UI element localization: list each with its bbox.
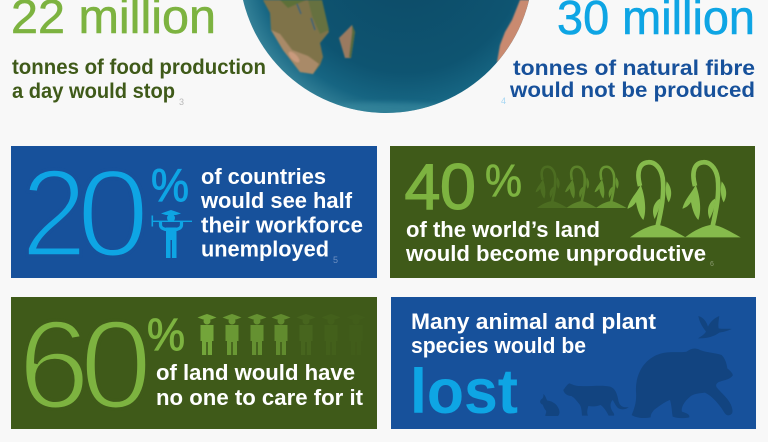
big number 20% xyxy=(21,144,189,283)
panel text: no one to care for it xyxy=(156,385,364,410)
big number 40%: 0 xyxy=(440,150,476,223)
stat: 22 million: tonnes of food production xyxy=(12,56,266,79)
panel: 40% of land: 6 xyxy=(710,261,714,268)
panel text xyxy=(156,360,364,410)
panel text: their workforce xyxy=(201,212,363,238)
big number 60%: % xyxy=(147,309,185,360)
stat: 22 million: a day would stop xyxy=(12,80,175,103)
stat: 30 million: tonnes of natural fibre xyxy=(513,57,755,80)
big number 40%: 4 xyxy=(404,150,441,223)
panel text: would become unproductive xyxy=(405,241,706,266)
stat: 30 million: would not be produced xyxy=(509,79,755,102)
big number 20%: % xyxy=(151,159,189,211)
panel text: of the world’s land xyxy=(406,217,600,242)
panel text: species would be xyxy=(411,333,586,358)
panel: 60% of land xyxy=(11,295,377,436)
stat: 22 million xyxy=(11,0,266,107)
panel: 20% of countries xyxy=(11,144,377,283)
icon: animal silhouettes xyxy=(540,316,733,418)
panel text xyxy=(411,309,657,358)
panel: 40% of land xyxy=(390,146,755,278)
word: lost: lost xyxy=(410,357,518,427)
icon: row of farmers fading out xyxy=(198,314,366,355)
icon: wilting plants xyxy=(536,162,741,237)
big number 60%: 0 xyxy=(80,295,152,436)
big number 60%: 6 xyxy=(18,295,90,436)
panel: species lost xyxy=(391,297,756,429)
panel text xyxy=(200,164,363,262)
icon: farmer with rake xyxy=(152,210,192,258)
big number 40% xyxy=(404,150,522,223)
panel text: Many animal and plant xyxy=(411,309,657,334)
stat: 30 million xyxy=(501,0,755,106)
stat: 22 million: 3 xyxy=(179,97,184,107)
panel: 20% of countries: 5 xyxy=(333,255,338,265)
globe image xyxy=(239,0,545,114)
big number 20%: 0 xyxy=(77,144,149,282)
big number 40%: % xyxy=(485,155,522,206)
panel text: of land would have xyxy=(156,360,355,385)
panel text: would see half xyxy=(200,188,353,213)
panel text: unemployed xyxy=(201,236,329,262)
panel text: of countries xyxy=(201,164,326,189)
big number 20%: 2 xyxy=(21,144,87,283)
big number 60% xyxy=(18,295,185,436)
panel text xyxy=(405,217,706,266)
stat: 30 million: 4 xyxy=(501,96,506,106)
